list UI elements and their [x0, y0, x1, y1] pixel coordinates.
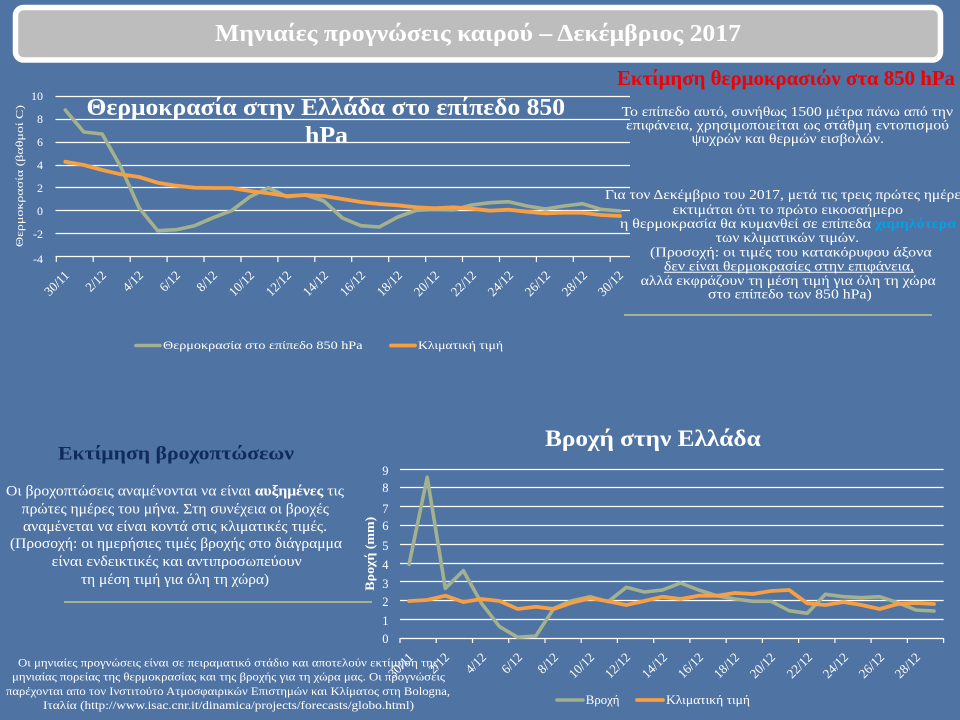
y axis title: Θερμοκρασία (βαθμοί C): [14, 105, 26, 247]
x axis date labels: 2/12: [82, 268, 109, 294]
text block: December outlook: η θερμοκρασία θα κυμανθεί σε επίπεδα χαμηλότερα: [620, 217, 956, 232]
heading: Εκτίμηση θερμοκρασιών στα 850 hPa: [617, 66, 955, 90]
text block: December outlook: [605, 188, 960, 303]
y axis title: Βροχή (mm): [362, 517, 377, 591]
y axis labels: [31, 89, 43, 266]
y axis labels: -2: [33, 227, 43, 241]
text block: rainfall outlook: τη μέση τιμή για όλη τη χώρα): [81, 572, 269, 588]
text block: December outlook: Για τον Δεκέμβριο του 2017, μετά τις τρεις πρώτες ημέρες: [605, 188, 960, 203]
text block: definition: Το επίπεδο αυτό, συνήθως 1500 μέτρα πάνω από την: [622, 105, 953, 120]
y axis labels: 4: [37, 158, 43, 172]
y axis labels: 2: [382, 595, 388, 609]
text block: rainfall outlook: Οι βροχοπτώσεις αναμένονται να είναι αυξημένες τις: [6, 484, 344, 500]
chart title: rainfall: Βροχή στην Ελλάδα: [545, 426, 761, 451]
footnote: source and disclaimer: Οι μηνιαίες προγνώσεις είναι σε πειραματικό στάδιο και αποτελούν εκτίμηση της: [18, 656, 438, 670]
series: climatological value: [409, 590, 934, 609]
x axis date labels: 10/12: [226, 268, 257, 299]
x axis date labels: 6/12: [156, 268, 183, 294]
x axis date labels: [41, 268, 626, 299]
series: rainfall: [409, 477, 934, 637]
y axis labels: 6: [382, 519, 388, 533]
x axis date labels: 16/12: [337, 268, 368, 299]
y axis labels: 7: [382, 502, 388, 516]
text block: rainfall outlook: είναι ενδεικτικές και αντιπροσωπεύουν: [52, 554, 302, 570]
text block: December outlook: των κλιματικών τιμών.: [716, 231, 859, 246]
x axis date labels: 16/12: [675, 650, 706, 681]
legend: Κλιματική τιμή: [666, 692, 750, 707]
legend: [136, 338, 503, 352]
x axis date labels: 8/12: [534, 650, 561, 676]
legend: Κλιματική τιμή: [418, 338, 503, 352]
x axis date labels: 18/12: [374, 268, 405, 299]
x axis date labels: 10/12: [566, 650, 597, 681]
footnote: source and disclaimer: παρέχονται απο τον Ινστιτούτο Ατμοσφαιρικών Επιστημών και Κλίματος στη Bologna,: [6, 684, 450, 698]
legend: Βροχή: [586, 692, 620, 707]
x axis date labels: 4/12: [462, 650, 489, 676]
y axis labels: 5: [382, 539, 388, 553]
text block: definition: ψυχρών και θερμών εισβολών.: [692, 132, 884, 147]
chart title: temperature: [86, 95, 565, 149]
text block: December outlook: στο επίπεδο των 850 hPa): [708, 288, 872, 303]
x axis date labels: 28/12: [559, 268, 590, 299]
y axis labels: 8: [382, 481, 388, 495]
header banner: Μηνιαίες προγνώσεις καιρού – Δεκέμβριος 2017: [215, 21, 741, 47]
y axis labels: [382, 464, 389, 646]
x axis date labels: 30/11: [385, 650, 416, 681]
x axis date labels: 22/12: [448, 268, 479, 299]
chart title: temperature: hPa: [305, 123, 348, 149]
chart title: temperature: Θερμοκρασία στην Ελλάδα στο επίπεδο 850: [86, 95, 565, 121]
x axis date labels: 30/11: [41, 268, 72, 299]
x axis date labels: 18/12: [711, 650, 742, 681]
x axis date labels: 14/12: [639, 650, 670, 681]
text block: December outlook: εκτιμάται ότι το πρώτο εικοσαήμερο: [673, 203, 903, 218]
x axis date labels: 24/12: [820, 650, 851, 681]
x axis date labels: 24/12: [485, 268, 516, 299]
y axis labels: 2: [37, 181, 43, 195]
y axis labels: 10: [31, 89, 43, 103]
panel: rainfall estimate: [6, 443, 372, 602]
text block: rainfall outlook: [6, 484, 344, 588]
y axis labels: 8: [37, 112, 43, 126]
x axis date labels: 12/12: [263, 268, 294, 299]
text block: December outlook: δεν είναι θερμοκρασίες στην επιφάνεια,: [664, 260, 914, 275]
line chart: temperature at 850 hPa: [14, 89, 630, 352]
header banner: [16, 8, 940, 60]
x axis date labels: [385, 650, 923, 681]
series: climatological value: [65, 162, 620, 216]
x axis date labels: 26/12: [522, 268, 553, 299]
x axis date labels: 4/12: [119, 268, 146, 294]
x axis date labels: 22/12: [784, 650, 815, 681]
footnote: source and disclaimer: Ιταλία (http://www.isac.cnr.it/dinamica/projects/forecasts/globo.html): [43, 698, 414, 712]
legend: [557, 692, 750, 707]
x axis date labels: 20/12: [411, 268, 442, 299]
x axis date labels: 6/12: [498, 650, 525, 676]
text block: rainfall outlook: πρώτες ημέρες του μήνα. Στη συνέχεια οι βροχές: [22, 501, 329, 517]
y axis labels: 9: [382, 464, 388, 478]
text block: rainfall outlook: (Προσοχή: οι ημερήσιες τιμές βροχής στο διάγραμμα: [10, 536, 342, 552]
x axis date labels: 20/12: [747, 650, 778, 681]
y axis labels: -4: [33, 252, 43, 266]
text block: December outlook: αλλά εκφράζουν τη μέση τιμή για όλη τη χώρα: [641, 274, 936, 289]
x axis date labels: 30/12: [595, 268, 626, 299]
x axis date labels: 12/12: [602, 650, 633, 681]
x axis date labels: 8/12: [193, 268, 220, 294]
text block: definition: [622, 105, 953, 147]
panel: temperature estimate: [605, 66, 960, 315]
text block: December outlook: (Προσοχή: οι τιμές του κατακόρυφου άξονα: [650, 246, 932, 261]
y axis labels: 6: [37, 135, 43, 149]
y axis labels: 3: [382, 577, 388, 591]
heading: Εκτίμηση βροχοπτώσεων: [58, 443, 295, 464]
text block: rainfall outlook: αναμένεται να είναι κοντά στις κλιματικές τιμές.: [23, 519, 327, 535]
footnote: source and disclaimer: μηνιαίας πορείας της θερμοκρασίας και της βροχής για τη χώρα μας. Οι προγνώσεις: [12, 670, 445, 684]
x axis date labels: 28/12: [892, 650, 923, 681]
line chart: rainfall: [362, 464, 944, 707]
text block: definition: επιφάνεια, χρησιμοποιείται ως στάθμη εντοπισμού: [626, 118, 949, 134]
y axis labels: 0: [382, 632, 388, 646]
x axis date labels: 14/12: [300, 268, 331, 299]
legend: Θερμοκρασία στο επίπεδο 850 hPa: [163, 338, 363, 352]
series: temperature: [65, 110, 620, 231]
y axis labels: 4: [382, 558, 389, 572]
y axis labels: 0: [37, 204, 43, 218]
y axis labels: 1: [382, 614, 388, 628]
x axis date labels: 26/12: [856, 650, 887, 681]
footnote: source and disclaimer: [6, 656, 450, 712]
x axis date labels: 2/12: [425, 650, 452, 676]
